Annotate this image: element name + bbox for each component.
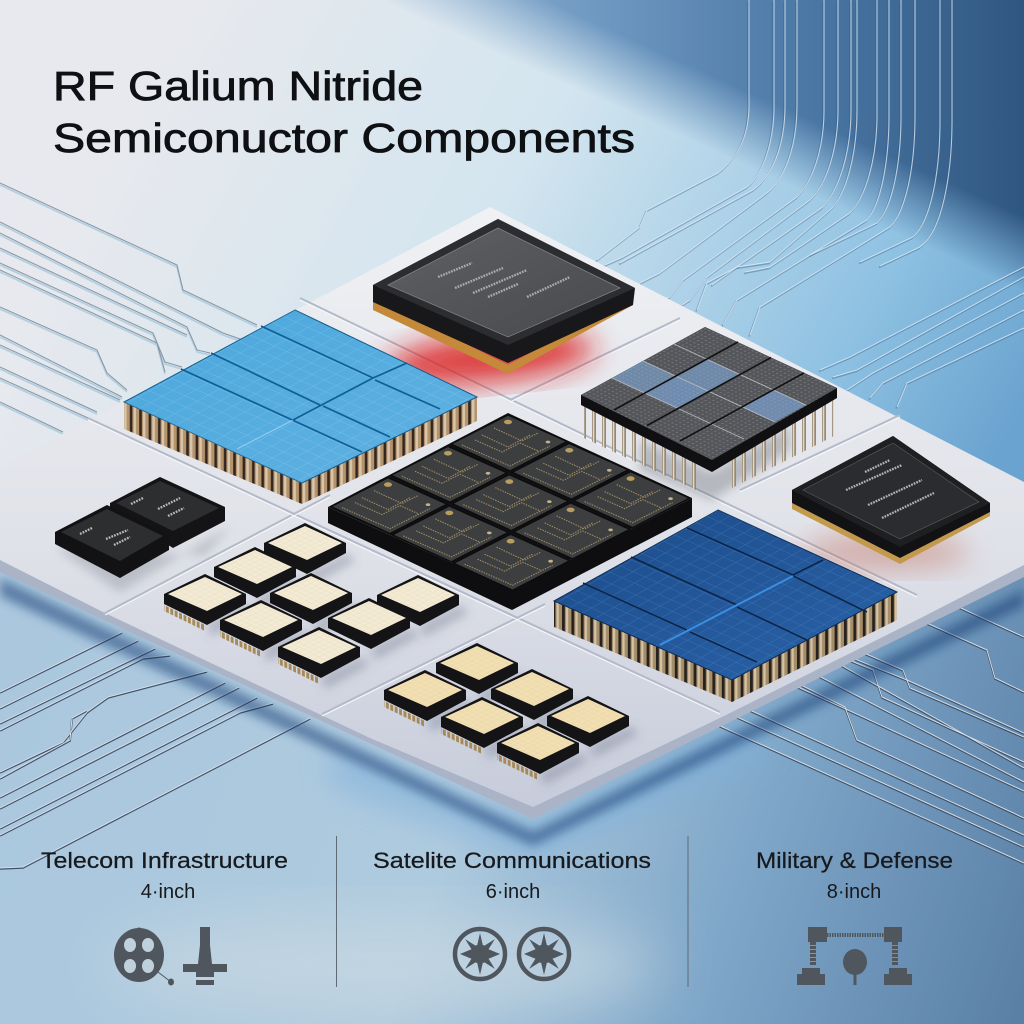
column: Telecom Infrastructure: 4·inch <box>141 881 195 903</box>
platform <box>0 207 1024 846</box>
chip: dark blue array with pins <box>554 510 897 702</box>
column: Satelite Communications: Satelite Communications <box>373 848 651 873</box>
icon: film reel and stem <box>114 927 227 986</box>
title: Semiconuctor Components <box>53 115 635 161</box>
column: Satelite Communications: 6·inch <box>486 881 540 903</box>
title <box>53 63 635 161</box>
column: Telecom Infrastructure: Telecom Infrastructure <box>41 848 288 873</box>
title: RF Galium Nitride <box>53 63 423 109</box>
chips: black pair, left tile <box>55 477 232 592</box>
dividers <box>336 836 688 987</box>
chips: beige small packages, lower-left tile <box>164 523 468 689</box>
column: Telecom Infrastructure <box>41 848 288 986</box>
chip: light blue array with brown pins <box>124 310 477 504</box>
chip: black flip-chip package with red glow, top centre <box>373 219 635 393</box>
column: Military & Defense: 8·inch <box>827 881 881 903</box>
chip: central 3x3 gold-traced module <box>328 413 692 610</box>
chips: beige small packages, bottom tile <box>384 643 638 785</box>
icon: two satellite wheels <box>455 929 569 979</box>
icon: robotic arms and dial <box>797 927 912 985</box>
column: Military & Defense <box>756 848 953 985</box>
chip: dark tile grid with long pins <box>581 327 837 500</box>
column: Satelite Communications <box>373 848 651 979</box>
column: Military & Defense: Military & Defense <box>756 848 953 873</box>
chip: black package with red glow, right <box>792 436 990 570</box>
